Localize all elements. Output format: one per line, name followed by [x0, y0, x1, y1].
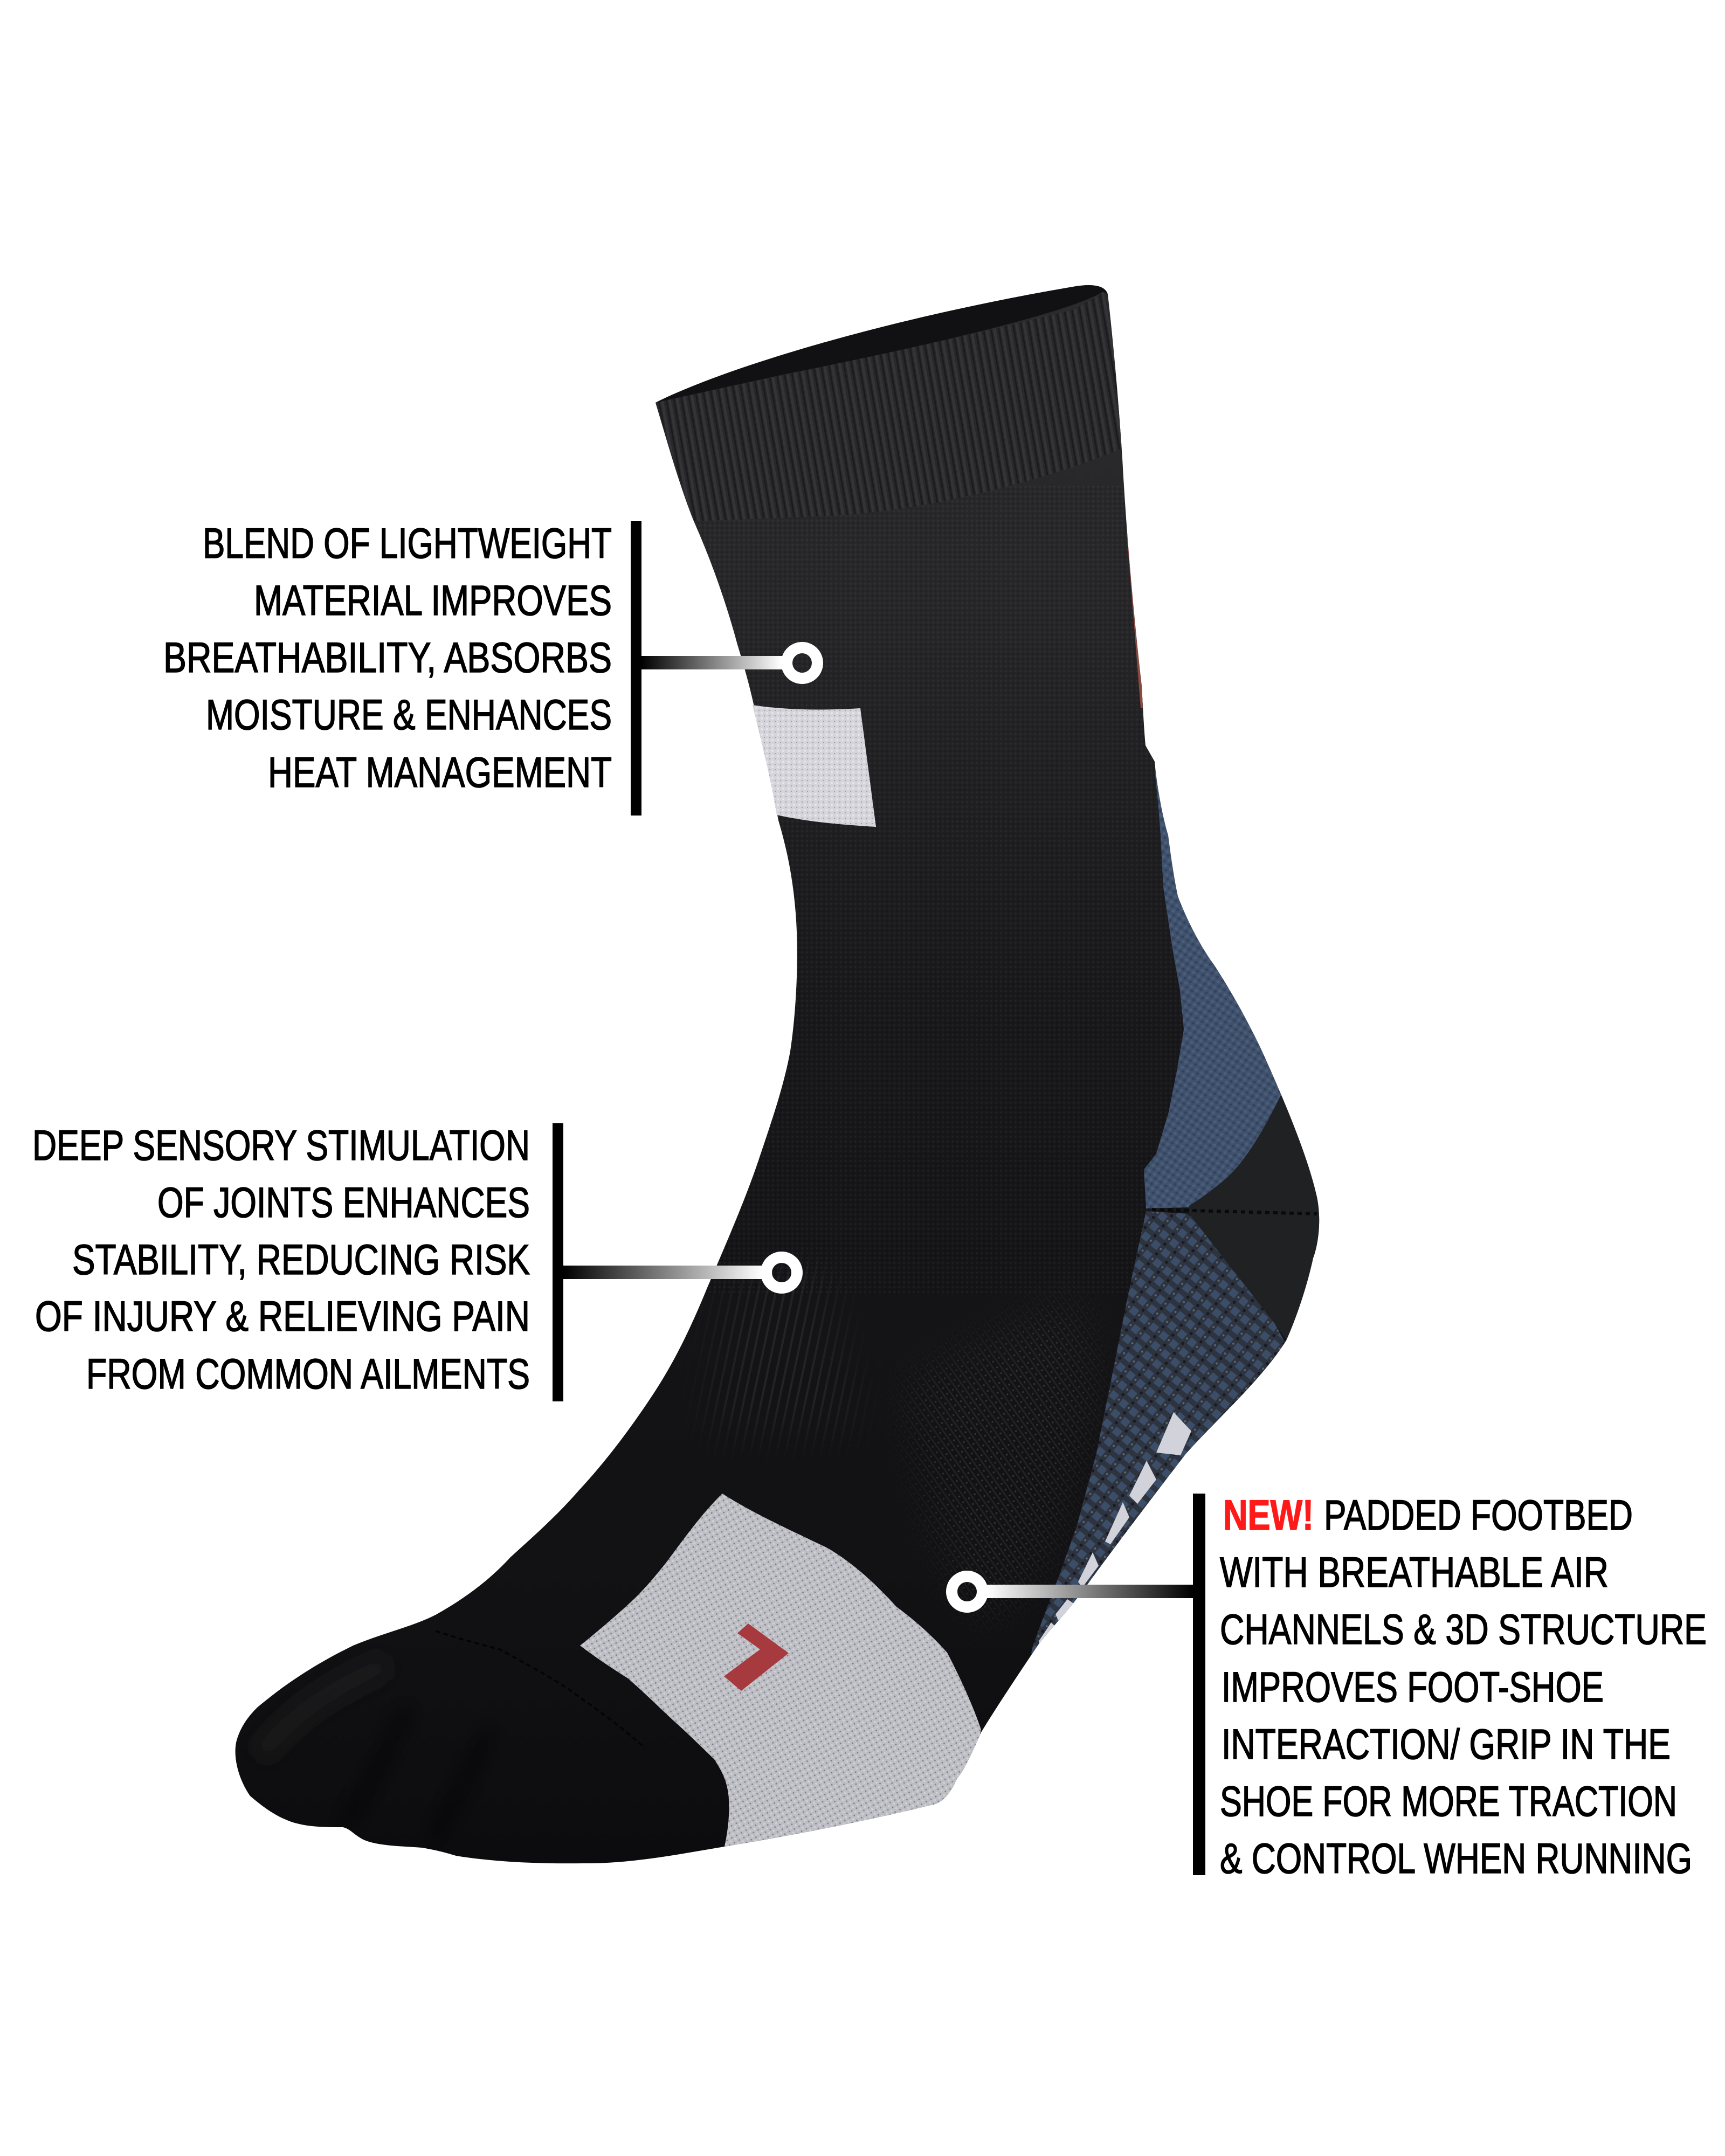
vertical bar [631, 521, 641, 816]
callout text: sensory stimulation: DEEP SENSORY STIMULATION [32, 1122, 530, 1169]
callout text: lightweight material: MATERIAL IMPROVES [254, 577, 612, 624]
red logo mark [724, 1623, 789, 1691]
callout: lightweight material [163, 520, 817, 816]
red edge strip [1127, 533, 1144, 708]
knit texture [647, 485, 1186, 1294]
callout text: lightweight material: HEAT MANAGEMENT [268, 749, 612, 796]
sock fabric details [259, 285, 1331, 1854]
woven logo patches [1039, 1412, 1191, 1647]
callout text: lightweight material: MOISTURE & ENHANCES [206, 691, 612, 738]
callout text: lightweight material: BLEND OF LIGHTWEIGHT [203, 520, 612, 567]
sock illustration [236, 285, 1331, 1863]
callout text: sensory stimulation: OF JOINTS ENHANCES [157, 1179, 530, 1226]
callout: padded footbed [952, 1491, 1707, 1882]
callout text: padded footbed: PADDED FOOTBED [1324, 1491, 1633, 1539]
ribbed instep zone [714, 1275, 851, 1431]
callout text: padded footbed: WITH BREATHABLE AIR [1220, 1549, 1609, 1596]
callout text: lightweight material [163, 520, 612, 796]
toe seam [436, 1631, 645, 1749]
ribbed collar [656, 292, 1127, 521]
callout text: sensory stimulation: FROM COMMON AILMENTS [86, 1350, 530, 1398]
white calf patch [753, 705, 876, 827]
callout text: sensory stimulation [32, 1122, 530, 1398]
lower blue mesh panel [1030, 1211, 1285, 1657]
connector line [641, 656, 787, 669]
callout: sensory stimulation [32, 1122, 797, 1401]
callout text: padded footbed: IMPROVES FOOT-SHOE [1222, 1663, 1604, 1711]
grey forefoot patch [580, 1494, 981, 1854]
heel shading [1189, 1095, 1320, 1340]
sock body [236, 285, 1319, 1863]
callout text: sensory stimulation: STABILITY, REDUCING RISK [72, 1236, 530, 1283]
callout text: padded footbed: NEW! [1223, 1491, 1314, 1539]
connector line [981, 1585, 1193, 1598]
marker ring [952, 1576, 982, 1607]
callout text: lightweight material: BREATHABILITY, ABSORBS [163, 634, 612, 681]
foot mesh zone [898, 1296, 1109, 1623]
marker ring [787, 648, 817, 678]
vertical bar [1193, 1494, 1205, 1875]
heel seam stitch [1152, 1210, 1317, 1214]
toe highlight [259, 1663, 388, 1757]
toe folds [343, 1708, 491, 1848]
collar opening [656, 285, 1108, 403]
connector line [563, 1266, 768, 1279]
callout text: sensory stimulation: OF INJURY & RELIEVING PAIN [35, 1293, 530, 1340]
vertical bar [553, 1123, 563, 1401]
callout text: padded footbed [1220, 1491, 1707, 1882]
upper blue panel [1144, 770, 1281, 1208]
marker ring [767, 1257, 797, 1288]
